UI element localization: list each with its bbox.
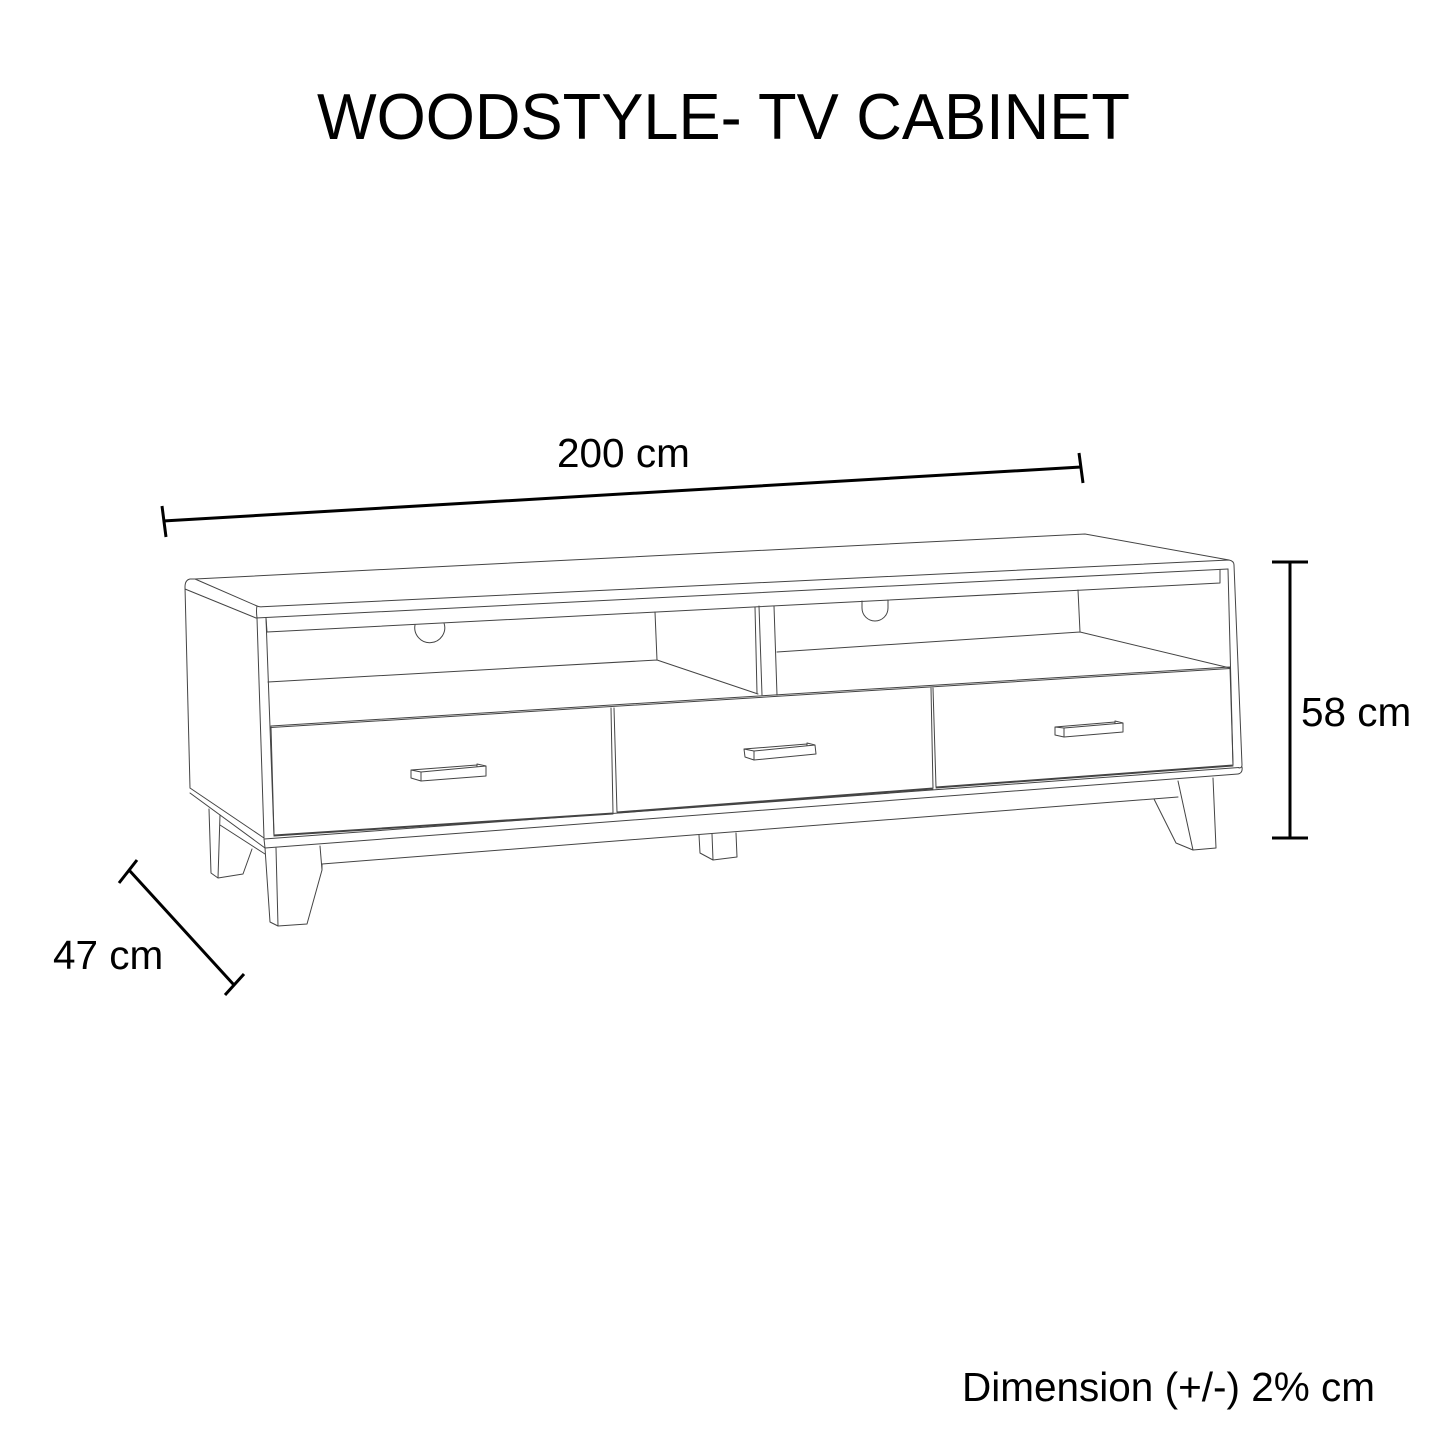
- TV cabinet line drawing: [185, 534, 1242, 926]
- left side panel and post: [190, 618, 274, 854]
- drawer rail: [271, 667, 1230, 728]
- middle leg: [699, 833, 737, 860]
- right drawer: [933, 668, 1233, 788]
- middle drawer handle: [744, 743, 816, 760]
- cable hole left: [415, 623, 445, 643]
- title: WOODSTYLE- TV CABINET: [317, 80, 1130, 153]
- right post: [1228, 565, 1242, 774]
- tolerance note: Dimension (+/-) 2% cm: [962, 1364, 1375, 1410]
- depth label: 47 cm: [53, 932, 163, 978]
- cable hole right: [862, 600, 888, 621]
- width dimension line: [162, 453, 1083, 537]
- width label: 200 cm: [557, 430, 690, 476]
- right back leg: [1154, 799, 1193, 850]
- plinth: [264, 768, 1239, 864]
- left drawer handle: [411, 764, 486, 781]
- top rail and inner lip: [266, 570, 1220, 632]
- center divider: [755, 606, 777, 695]
- height label: 58 cm: [1301, 689, 1411, 735]
- right drawer handle: [1055, 721, 1123, 737]
- left open shelf: [268, 612, 758, 694]
- depth dimension line: [119, 860, 244, 995]
- middle drawer: [614, 688, 933, 813]
- back left leg: [209, 809, 252, 878]
- right open shelf: [777, 590, 1230, 668]
- right front leg: [1178, 778, 1216, 850]
- cabinet top surface: [185, 534, 1234, 788]
- height dimension line: [1272, 562, 1308, 838]
- front left leg: [265, 846, 322, 926]
- left drawer: [271, 708, 613, 836]
